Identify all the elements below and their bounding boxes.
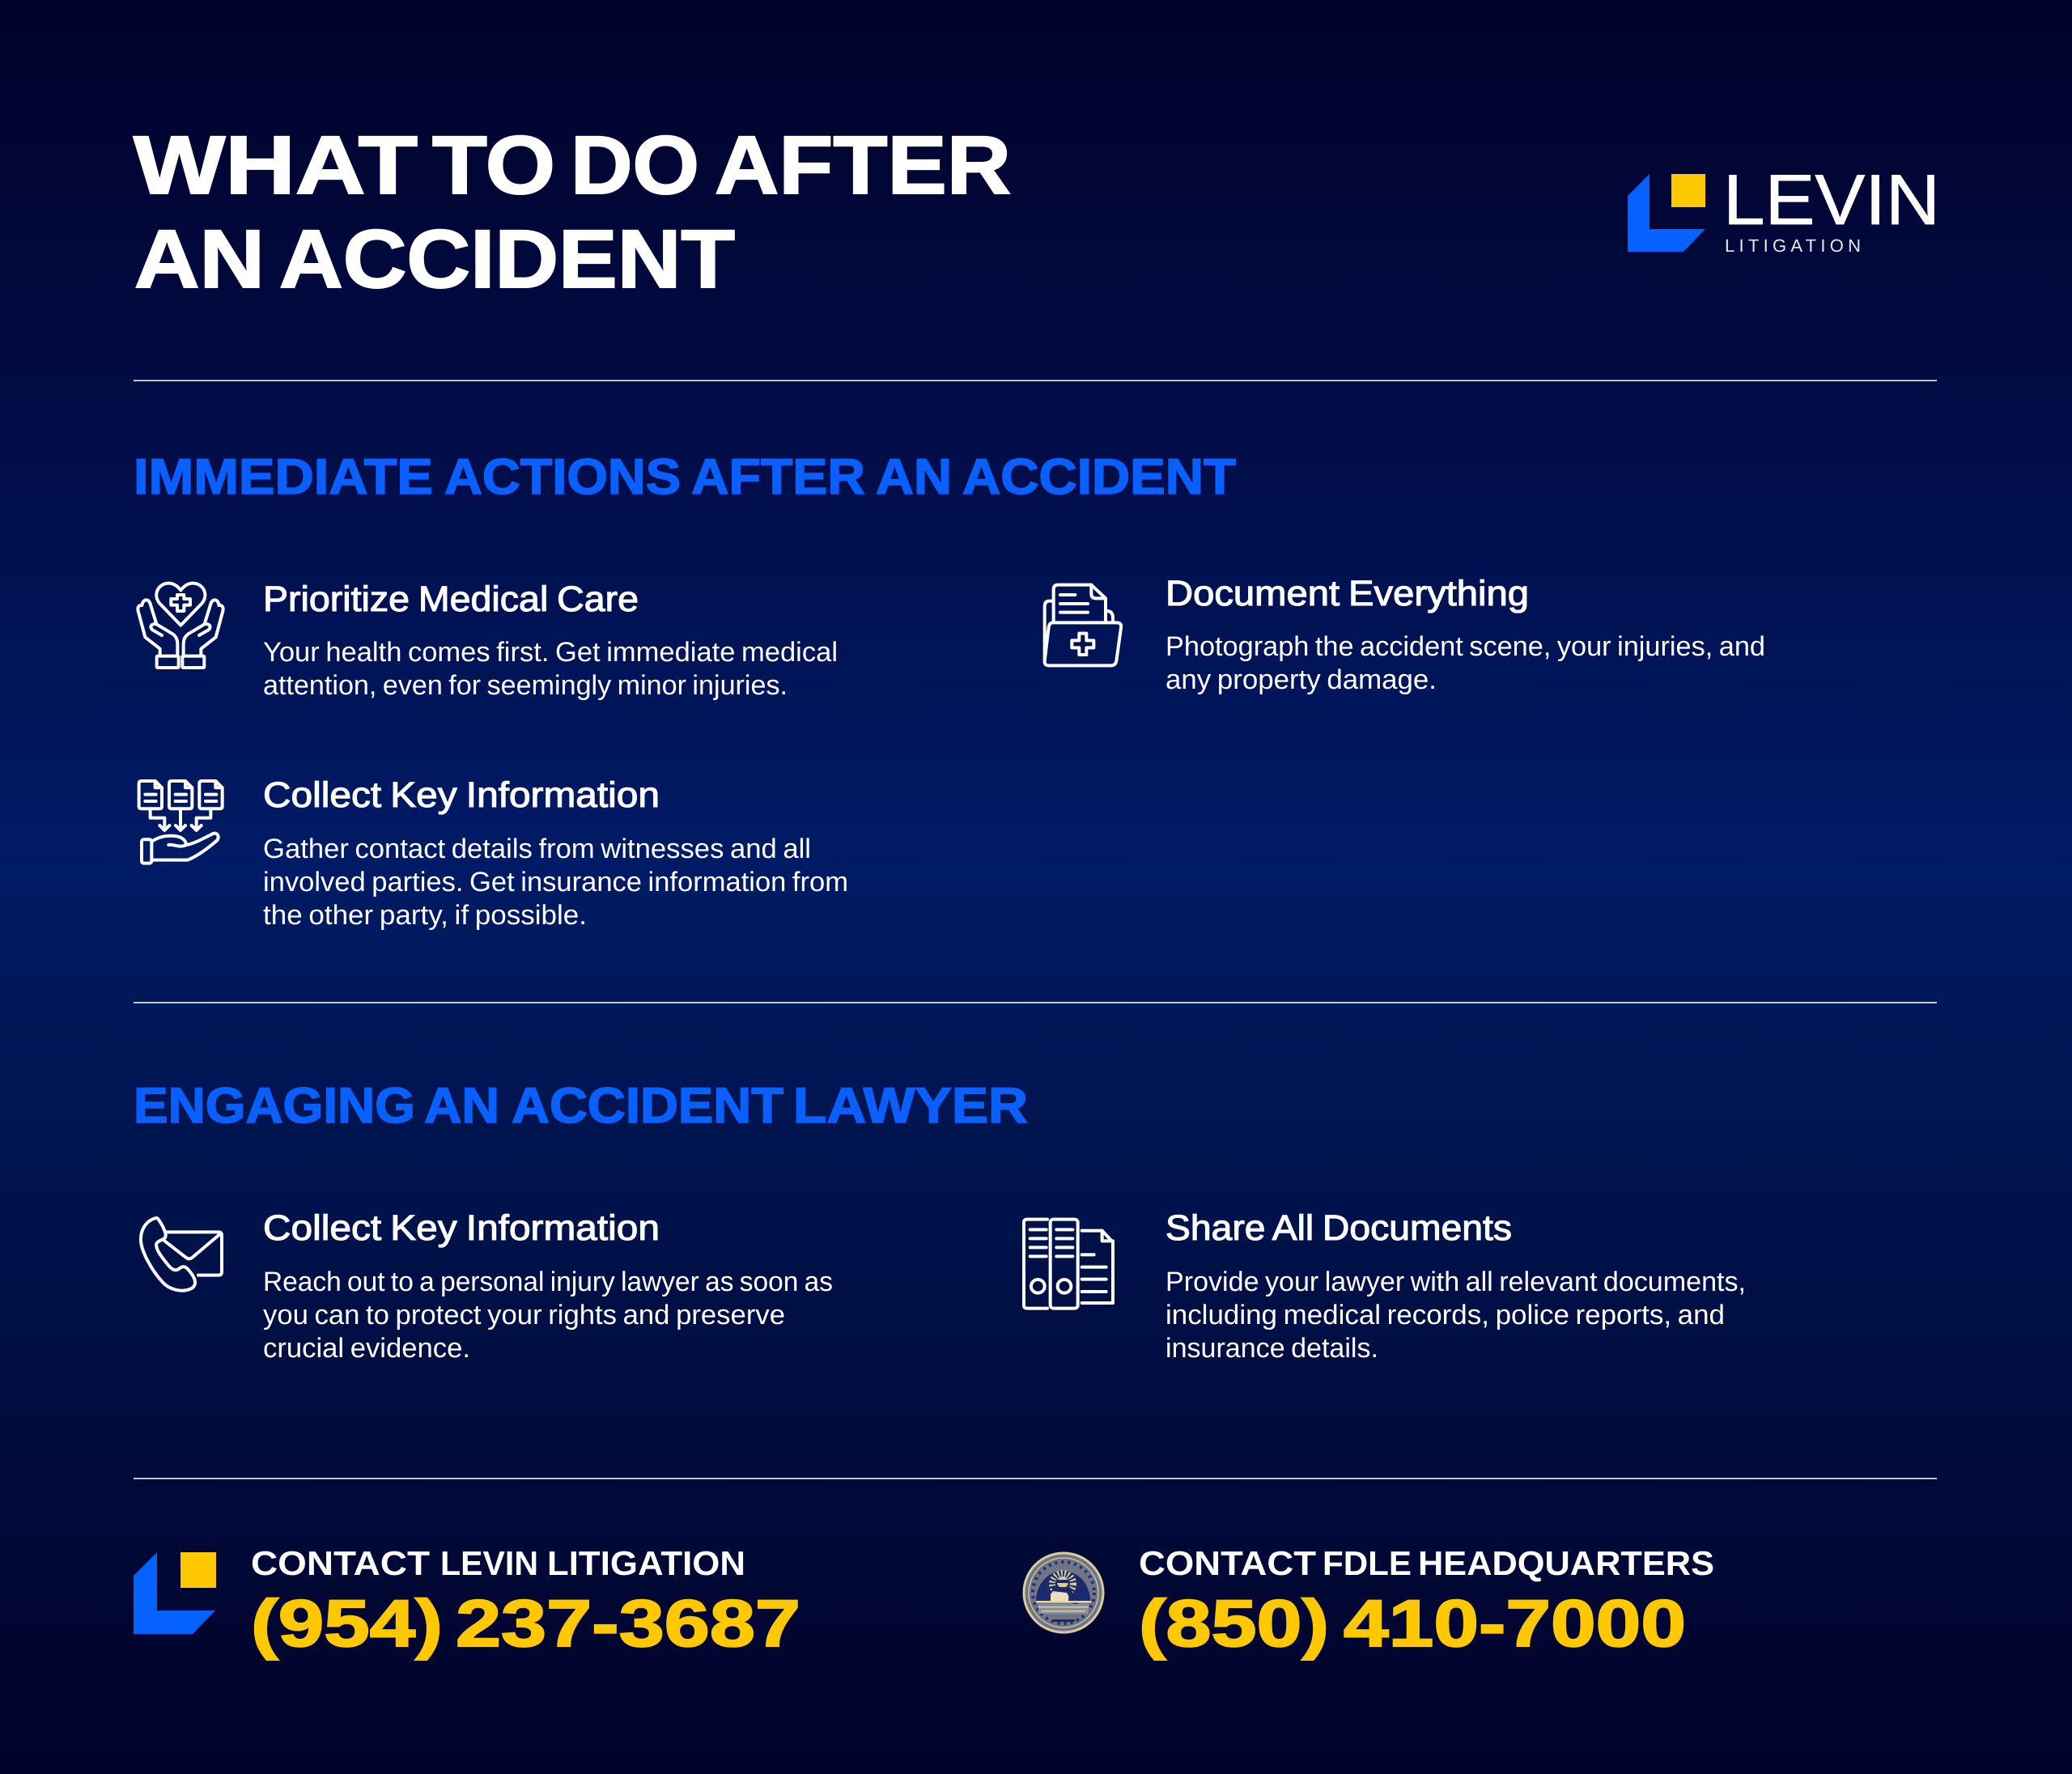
contact: FDLE headquarters <box>1139 1544 1714 1661</box>
item: document everything <box>1166 574 1765 695</box>
item: collect key information: Collect Key Information <box>263 775 660 815</box>
logo: Levin Litigation <box>1628 159 1940 256</box>
icon: hands holding heart <box>138 584 223 668</box>
item: prioritize medical care: attention, even for seemingly minor injuries. <box>263 670 788 701</box>
contact: FDLE headquarters: HEADQUARTERS <box>1418 1544 1714 1582</box>
item: collect key information: involved parties. Get insurance information from <box>263 867 848 898</box>
heading: immediate actions <box>134 449 1236 505</box>
item: collect key information: the other party, if possible. <box>263 900 587 931</box>
item: share all documents: including medical records, police reports, and <box>1166 1300 1725 1330</box>
item: document everything: Photograph the accident scene, your injuries, and <box>1166 631 1765 662</box>
title: ACCIDENT <box>279 213 735 305</box>
icon: documents into hand <box>139 781 223 864</box>
item: share all documents: Share All Documents <box>1166 1208 1512 1248</box>
heading: immediate actions: IMMEDIATE <box>134 449 433 505</box>
item: document everything: Document Everything <box>1166 574 1529 613</box>
heading: engaging an accident lawyer: AN <box>424 1078 499 1134</box>
contact: Levin Litigation: CONTACT <box>251 1544 430 1582</box>
contact: Levin Litigation: LITIGATION <box>547 1544 745 1582</box>
heading: immediate actions: AN <box>876 449 952 505</box>
item: collect key information (lawyer) <box>263 1208 833 1364</box>
item: prioritize medical care <box>263 579 838 701</box>
contact: FDLE headquarters: CONTACT <box>1139 1544 1316 1582</box>
contact: Levin Litigation: (954) <box>251 1587 443 1661</box>
contact: Levin Litigation: LEVIN <box>440 1544 538 1582</box>
title <box>134 119 1011 305</box>
heading: engaging an accident lawyer: LAWYER <box>793 1078 1028 1134</box>
item: prioritize medical care: Prioritize Medical Care <box>263 579 639 619</box>
contact: FDLE headquarters: (850) <box>1139 1587 1329 1661</box>
item: collect key information <box>263 775 848 931</box>
heading: engaging an accident lawyer <box>134 1078 1028 1134</box>
icon: binders and document <box>1024 1220 1113 1309</box>
title: WHAT <box>134 119 418 211</box>
contact: Levin Litigation <box>251 1544 800 1661</box>
title: DO <box>571 119 699 211</box>
title: AN <box>134 213 265 305</box>
icon: Levin logo mark <box>134 1552 216 1634</box>
item: collect key information (lawyer): Collect Key Information <box>263 1208 660 1248</box>
icon: folder with document <box>1045 585 1121 665</box>
item: document everything: any property damage. <box>1166 664 1437 695</box>
item: share all documents: insurance details. <box>1166 1333 1378 1364</box>
item: collect key information (lawyer): Reach out to a personal injury lawyer as soon as <box>263 1267 833 1297</box>
title: TO <box>432 119 555 211</box>
heading: immediate actions: ACTIONS <box>444 449 681 505</box>
heading: engaging an accident lawyer: ACCIDENT <box>512 1078 783 1134</box>
icon: phone and envelope <box>141 1218 222 1291</box>
heading: immediate actions: AFTER <box>691 449 865 505</box>
contact: Levin Litigation: 237-3687 <box>456 1587 800 1661</box>
logo: Levin Litigation: LITIGATION <box>1725 236 1861 256</box>
contact: FDLE headquarters: 410-7000 <box>1344 1587 1686 1661</box>
icon: FDLE seal <box>1024 1553 1103 1632</box>
item: collect key information: Gather contact details from witnesses and all <box>263 834 811 864</box>
item: collect key information (lawyer): crucial evidence. <box>263 1333 470 1364</box>
item: share all documents <box>1166 1208 1746 1364</box>
item: prioritize medical care: Your health comes first. Get immediate medical <box>263 637 838 668</box>
contact: FDLE headquarters: FDLE <box>1323 1544 1412 1582</box>
title: AFTER <box>715 119 1011 211</box>
heading: immediate actions: ACCIDENT <box>962 449 1236 505</box>
logo: Levin Litigation: LEVIN <box>1723 159 1940 240</box>
item: collect key information (lawyer): you can to protect your rights and preserve <box>263 1300 785 1330</box>
item: share all documents: Provide your lawyer with all relevant documents, <box>1166 1267 1746 1297</box>
heading: engaging an accident lawyer: ENGAGING <box>134 1078 415 1134</box>
